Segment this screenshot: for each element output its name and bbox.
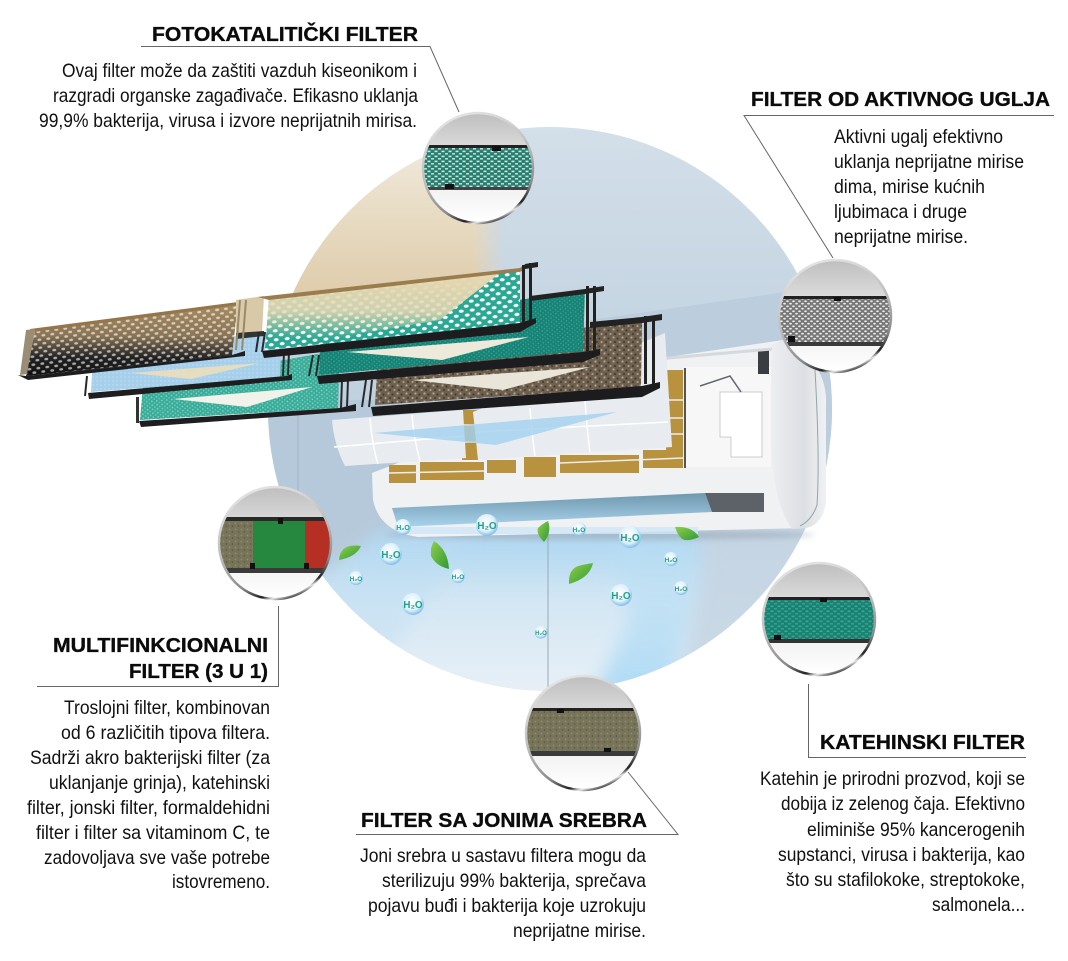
description: pojavu buđi i bakterija koje uzrokuju (368, 895, 646, 917)
heading: FILTER SA JONIMA SREBRA (361, 809, 647, 832)
lens: activated carbon filter (779, 260, 891, 372)
description: uklanjanje grinja), katehinski (49, 772, 270, 794)
heading: FILTER OD AKTIVNOG UGLJA (751, 88, 1050, 111)
lens: catechin filter (763, 563, 875, 675)
description: što su stafilokoke, streptokoke, (786, 869, 1025, 891)
background circle (268, 120, 835, 720)
panel: photocatalytic filter text (39, 22, 459, 132)
air conditioner unit (372, 340, 826, 540)
description: filter, jonski filter, formaldehidni (27, 797, 270, 819)
description: eliminiše 95% kancerogenih (807, 819, 1025, 841)
lens: 3-in-1 filter (219, 487, 331, 599)
description (27, 697, 270, 893)
water molecule bubbles: H₂O (452, 574, 464, 581)
panel: brown-black mesh filter (18, 296, 264, 380)
description (834, 126, 1024, 248)
description: sterilizuju 99% bakterija, sprečava (382, 870, 646, 892)
heading (53, 634, 268, 683)
water molecule bubbles: H₂O (535, 631, 547, 637)
panel: catechin filter text (760, 684, 1026, 916)
description: zadovoljava sve vaše potrebe (44, 847, 270, 869)
heading: FILTER (3 U 1) (129, 660, 268, 683)
heading: FOTOKATALITIČKI FILTER (152, 22, 418, 46)
description: Troslojni filter, kombinovan (64, 697, 270, 719)
panel: 3-in-1 filter text (27, 606, 278, 893)
description: 99,9% bakterija, virusa i izvore neprijatnih mirisa. (39, 110, 417, 132)
description: salmonela... (932, 894, 1025, 916)
panel: brown granular filter (362, 314, 662, 416)
water molecule bubbles: H₂O (350, 576, 362, 583)
heading: KATEHINSKI FILTER (820, 731, 1025, 754)
water molecule bubbles: H₂O (573, 527, 585, 534)
description: Joni srebra u sastavu filtera mogu da (360, 845, 646, 867)
blue air arrow (374, 412, 617, 445)
description: Aktivni ugalj efektivno (834, 126, 1003, 148)
description: Katehin je prirodni prozvod, koji se (760, 768, 1025, 790)
description: neprijatne mirise. (834, 226, 968, 248)
water molecule bubbles: H₂O (675, 586, 687, 593)
description: od 6 različitih tipova filtera. (61, 722, 270, 744)
water molecule bubbles (349, 514, 688, 638)
water molecule bubbles: H₂O (381, 550, 401, 561)
description: filter i filter sa vitaminom C, te (36, 822, 270, 844)
air outlet (392, 493, 712, 527)
description: neprijatne mirise. (513, 920, 646, 942)
panel: cream and teal mesh filter (256, 262, 538, 358)
lens: photocatalytic filter (423, 113, 533, 223)
description (39, 60, 418, 132)
description: Ovaj filter može da zaštiti vazduh kiseonikom i (62, 60, 417, 82)
green leaves (339, 521, 699, 584)
panel: teal filter (309, 286, 604, 384)
description (360, 845, 646, 942)
water molecule bubbles: H₂O (403, 600, 423, 611)
water molecule bubbles: H₂O (665, 557, 677, 564)
heading: MULTIFINKCIONALNI (53, 634, 268, 657)
unit side cover (771, 340, 826, 529)
description: Sadrži akro bakterijski filter (za (30, 747, 270, 769)
description (760, 768, 1025, 916)
heat exchanger coils (389, 370, 683, 483)
lens: silver ion filter (526, 676, 640, 790)
panel: activated carbon filter text (744, 88, 1054, 258)
description: ljubimaca i druge (834, 201, 967, 223)
water molecule bubbles: H₂O (611, 591, 631, 602)
description: supstanci, virusa i bakterija, kao (778, 844, 1025, 866)
water molecule bubbles: H₂O (477, 521, 497, 532)
description: uklanja neprijatne mirise (834, 151, 1024, 173)
description: razgradi organske zagađivače. Efikasno uklanja (53, 85, 418, 107)
description: istovremeno. (172, 871, 270, 893)
water molecule bubbles: H₂O (620, 533, 640, 544)
control panel (685, 367, 771, 467)
description: dima, mirise kućnih (834, 176, 985, 198)
panel: silver ion filter text (356, 772, 678, 942)
water molecule bubbles: H₂O (396, 525, 410, 532)
removable white mesh filters (332, 333, 672, 466)
panel: light blue filter (85, 330, 292, 399)
panel: blue-green filter (bottom left) (136, 350, 356, 427)
description: dobija iz zelenog čaja. Efektivno (781, 793, 1025, 815)
